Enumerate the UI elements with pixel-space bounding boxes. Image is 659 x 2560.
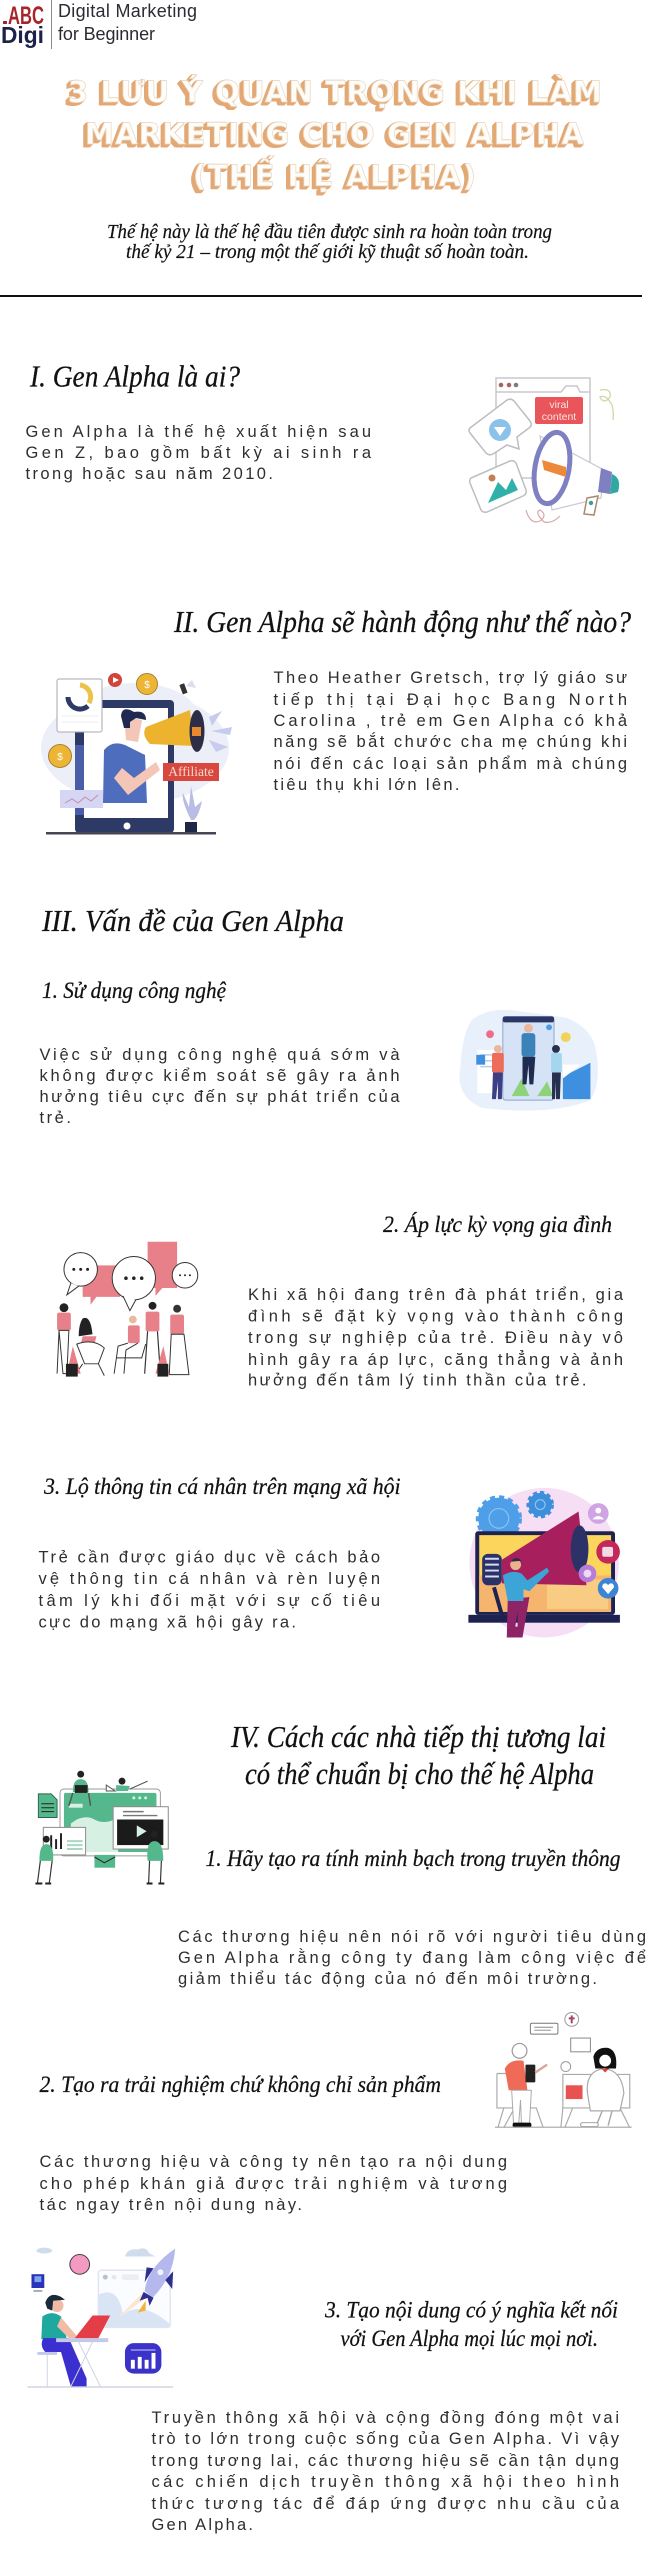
heading: III.2: 2. Áp lực kỳ vọng gia đình [383, 1212, 612, 1238]
heading: IV.2: 2. Tạo ra trải nghiệm chứ không chỉ sản phẩm [40, 2072, 441, 2098]
logo [1, 0, 197, 49]
text: IV.3: thức tương tác để đáp ứng được nhu cầu của [152, 2495, 620, 2513]
title: 3 LƯU Ý QUAN TRỌNG KHI LÀM [68, 75, 602, 109]
text: section II [274, 669, 628, 794]
text: IV.1: Gen Alpha rằng công ty đang làm công việc để [178, 1948, 646, 1967]
text: III.3: tâm lý khi đối mặt với sự cố tiêu [38, 1592, 380, 1610]
icon: affiliate promoter with megaphone: Affiliate [168, 764, 214, 779]
text: section I: Gen Alpha là thế hệ xuất hiện sau [26, 423, 371, 441]
text: III.2: hình gây ra áp lực, căng thẳng và ảnh [248, 1350, 623, 1369]
heading: section IV [230, 1719, 606, 1791]
heading: IV.3: 3. Tạo nội dung có ý nghĩa kết nối [324, 2298, 618, 2324]
text: III.3: vệ thông tin cá nhân và rèn luyện [38, 1570, 380, 1588]
icon: laptop with megaphone and social icons [468, 1488, 620, 1637]
text: IV.3: trò to lớn trong cuộc sống của Gen Alpha. Vì vậy [152, 2430, 620, 2448]
text: IV.3: Truyền thông xã hội và cộng đồng đóng một vai [152, 2409, 619, 2427]
logo: for Beginner [58, 24, 155, 44]
text: IV.3: các chiến dịch truyền thông xã hội theo hình [152, 2473, 619, 2491]
text: III.3 [38, 1548, 380, 1632]
text: III.3: cực do mạng xã hội gây ra. [38, 1614, 296, 1632]
text: IV.3: Gen Alpha. [152, 2516, 253, 2534]
subtitle: thế kỷ 21 – trong một thế giới kỹ thuật số hoàn toàn. [126, 241, 529, 263]
text: IV.2: Các thương hiệu và công ty nên tạo ra nội dung [40, 2153, 507, 2171]
text: IV.3: trong tương lai, các thương hiệu sẽ cần tận dụng [152, 2452, 619, 2470]
text: III.1: trẻ. [40, 1109, 71, 1127]
icon: viral content megaphone: viral [549, 399, 569, 411]
text: III.2: Khi xã hội đang trên đà phát triển, gia [248, 1286, 624, 1304]
icon: viral content megaphone: content [542, 411, 576, 423]
title: MARKETING CHO GEN ALPHA [85, 117, 585, 151]
heading: IV.3 [324, 2298, 618, 2352]
heading: section III: III. Vấn đề của Gen Alpha [41, 903, 344, 938]
icon: two people talking [495, 2012, 632, 2128]
text: section II: Theo Heather Gretsch, trợ lý giáo sư [274, 669, 627, 687]
title: (THẾ HỆ ALPHA) [193, 156, 476, 193]
text: III.2: trong sự nghiệp của trẻ. Điều này vô [248, 1329, 623, 1347]
text: IV.2: tác ngay trên nội dung này. [40, 2196, 302, 2214]
icon: people with smartphone [459, 1010, 598, 1111]
text: III.2: đình sẽ đặt kỳ vọng vào thành công [248, 1308, 623, 1326]
text: IV.2 [40, 2153, 507, 2214]
text: III.3: Trẻ cần được giáo dục về cách bảo [38, 1548, 380, 1566]
text: IV.1 [178, 1928, 646, 1988]
subtitle [107, 221, 552, 263]
icon: affiliate promoter with megaphone: $ [144, 680, 150, 691]
text: III.2: hưởng đến tâm lý tinh thần của trẻ. [248, 1372, 586, 1390]
heading: III.3: 3. Lộ thông tin cá nhân trên mạng xã hội [43, 1474, 400, 1500]
text: section II: nói đến các loại sản phẩm mà chúng [274, 755, 627, 773]
logo: Digi [1, 22, 44, 48]
heading: III.1: 1. Sử dụng công nghệ [42, 978, 227, 1004]
icon: group conversation [57, 1242, 198, 1377]
icon: affiliate promoter with megaphone: $ [57, 752, 63, 763]
text: IV.1: giảm thiểu tác động của nó đến môi trường. [178, 1970, 597, 1988]
heading: section IV: có thể chuẩn bị cho thế hệ Alpha [245, 1756, 594, 1791]
icon: woman at laptop with rocket [28, 2248, 175, 2388]
icon: affiliate promoter with megaphone [41, 673, 232, 834]
text: IV.2: cho phép khán giả được trải nghiệm và tương [40, 2175, 507, 2193]
text: III.2 [248, 1286, 624, 1390]
text: III.1: hưởng tiêu cực đến sự phát triển của [40, 1088, 400, 1106]
heading: section IV: IV. Cách các nhà tiếp thị tương lai [230, 1719, 606, 1754]
text: section II: Carolina , trẻ em Gen Alpha có khả [274, 712, 628, 730]
text: III.1: không được kiểm soát sẽ gây ra ảnh [40, 1067, 400, 1085]
logo: Digital Marketing [58, 1, 197, 21]
text: III.1: Việc sử dụng công nghệ quá sớm và [40, 1046, 400, 1064]
logo: ABC [8, 2, 44, 30]
text: III.1 [40, 1046, 400, 1127]
text: section I [26, 423, 372, 483]
icon: team with dashboards [35, 1771, 168, 1883]
text: section II: tiếp thị tại Đại học Bang North [274, 691, 627, 709]
text: section II: năng sẽ bắt chước cha mẹ chúng khi [274, 732, 627, 751]
text: section I: trong hoặc sau năm 2010. [26, 465, 273, 483]
icon: viral content megaphone [469, 378, 619, 522]
text: section II: tiêu thụ khi lớn lên. [274, 776, 460, 794]
text: section I: Gen Z, bao gồm bất kỳ ai sinh ra [26, 444, 372, 462]
text: IV.3 [152, 2409, 620, 2534]
heading: IV.1: 1. Hãy tạo ra tính minh bạch trong truyền thông [206, 1846, 621, 1872]
heading: IV.3: với Gen Alpha mọi lúc mọi nơi. [340, 2326, 598, 2352]
subtitle: Thế hệ này là thế hệ đầu tiên được sinh ra hoàn toàn trong [107, 221, 552, 243]
title [68, 75, 602, 193]
heading: section I: I. Gen Alpha là ai? [29, 358, 240, 394]
text: IV.1: Các thương hiệu nên nói rõ với người tiêu dùng [178, 1928, 646, 1946]
